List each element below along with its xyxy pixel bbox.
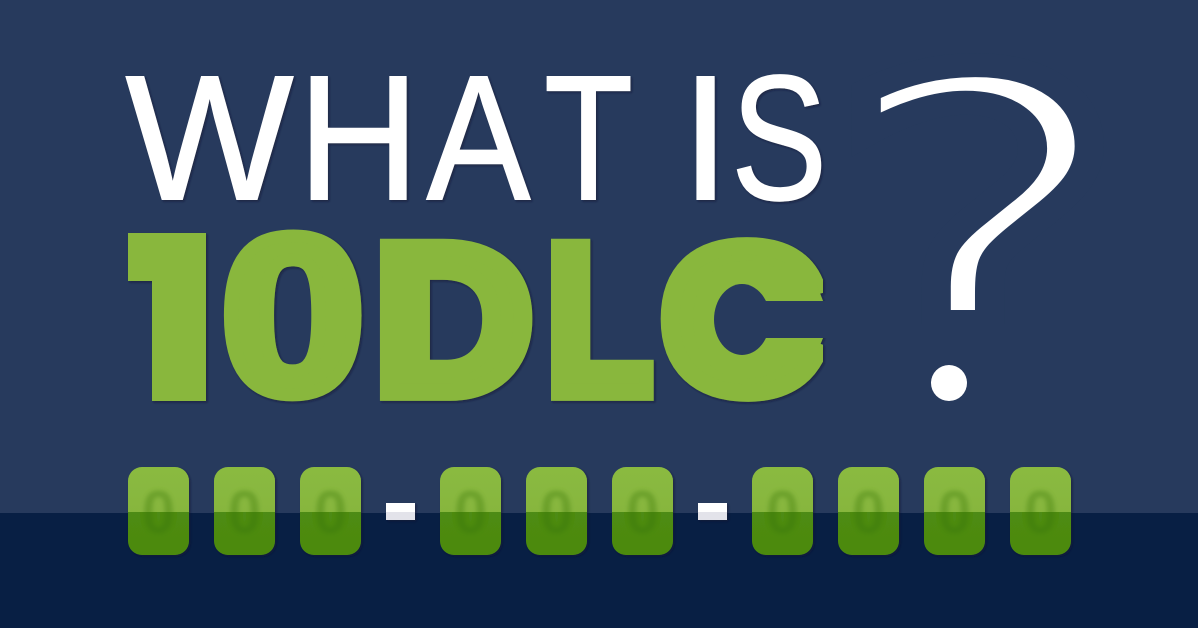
digit tile 7 <box>752 467 813 555</box>
heading: WHAT IS: W <box>126 38 294 237</box>
background lower band <box>0 513 1198 628</box>
digit tile 1 <box>128 467 189 555</box>
C aperture <box>765 301 832 338</box>
digit tile 5 <box>526 467 587 555</box>
C counter <box>714 284 770 355</box>
digit tile 1: 0 <box>142 479 175 546</box>
heading: WHAT IS <box>126 38 827 238</box>
digit tile 8 <box>838 467 899 555</box>
digit tile 2 <box>214 467 275 555</box>
dash 1 <box>386 503 415 520</box>
heading: WHAT IS: S <box>731 39 827 238</box>
heading: 10DLC: C <box>661 203 823 435</box>
heading: 10DLC: 0 <box>221 191 365 441</box>
phone number placeholder tiles <box>128 467 1071 555</box>
digit tile 6 <box>612 467 673 555</box>
digit tile 2: 0 <box>228 479 261 546</box>
heading: WHAT IS: T <box>544 40 633 237</box>
digit tile 9: 0 <box>938 479 971 546</box>
digit tile 10: 0 <box>1024 479 1057 546</box>
heading: 10DLC: 1 <box>118 200 236 437</box>
digit tile 4: 0 <box>454 479 487 546</box>
heading: WHAT IS: H <box>298 38 420 237</box>
digit tile 10 <box>1010 467 1071 555</box>
digit tile 4 <box>440 467 501 555</box>
dash 2 <box>698 503 727 520</box>
heading: WHAT IS: A <box>426 40 531 238</box>
heading: 10DLC: D <box>375 203 532 437</box>
digit tile 7: 0 <box>766 479 799 546</box>
question mark <box>880 77 1075 401</box>
heading: 10DLC: L <box>547 202 652 437</box>
digit tile 9 <box>924 467 985 555</box>
digit tile 6: 0 <box>626 479 659 546</box>
digit tile 8: 0 <box>852 479 885 546</box>
heading: WHAT IS: I <box>681 38 730 237</box>
digit tile 5: 0 <box>540 479 573 546</box>
digit tile 3: 0 <box>314 479 347 546</box>
digit tile 3 <box>300 467 361 555</box>
heading: 10DLC <box>128 230 825 404</box>
